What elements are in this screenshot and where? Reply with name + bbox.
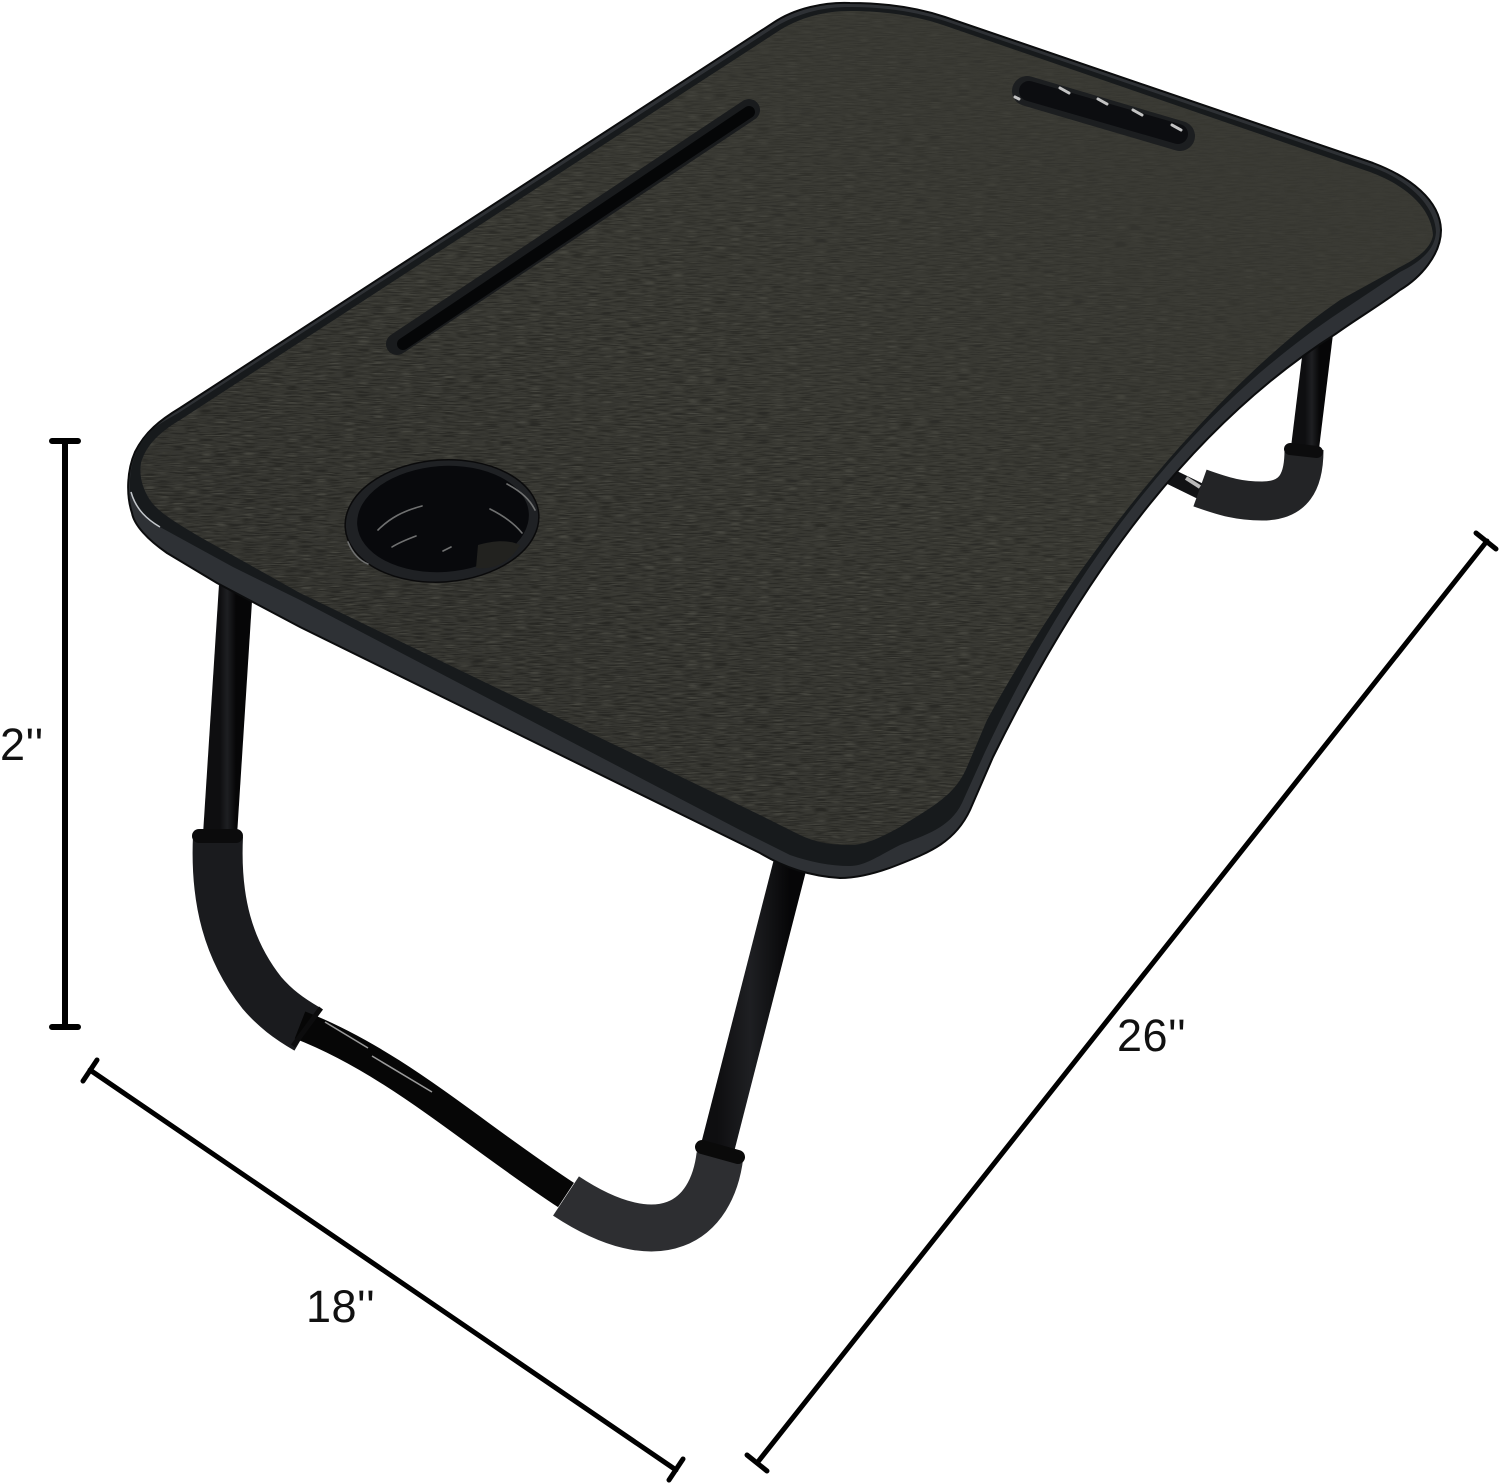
left leg pole <box>220 585 236 835</box>
tabletop wood surface <box>140 11 1433 845</box>
tabletop outer edge <box>128 3 1441 878</box>
cup holder <box>341 453 543 589</box>
height label: 2'' <box>0 719 44 770</box>
wood grain texture <box>140 72 1224 845</box>
width label: 18'' <box>306 1281 375 1332</box>
pen holder well <box>1029 91 1178 134</box>
front leg collar <box>702 1147 738 1157</box>
back leg connector highlight <box>1186 478 1200 487</box>
tablet slot <box>397 110 749 344</box>
length label: 26'' <box>1117 1010 1186 1061</box>
front leg pole <box>717 865 790 1150</box>
left leg collar <box>199 829 236 843</box>
left sleeve end collar <box>293 1008 321 1046</box>
back leg connector <box>1165 474 1210 496</box>
left leg <box>199 585 566 1195</box>
dimension: height <box>0 441 78 1027</box>
front leg <box>566 865 790 1228</box>
dimension: width 18 <box>83 1060 683 1480</box>
back leg pole <box>1305 325 1320 448</box>
tabletop dark rim <box>130 7 1436 866</box>
cup holder well <box>354 460 532 578</box>
width line <box>83 1060 683 1480</box>
tabletop <box>120 0 1450 890</box>
pen holder rim <box>1027 91 1180 136</box>
tabletop edge highlight <box>131 492 160 527</box>
crossbar tube <box>300 1025 566 1195</box>
cup holder floor patch <box>476 541 520 568</box>
slot opening <box>403 112 749 344</box>
front leg sleeve <box>566 1155 720 1228</box>
height line <box>52 441 78 1027</box>
left leg sleeve <box>218 836 307 1029</box>
cup holder rim <box>341 453 543 589</box>
pen holder <box>1015 88 1181 136</box>
slot rim <box>397 110 749 344</box>
pen holder highlights <box>1015 88 1181 130</box>
back leg <box>1165 325 1320 501</box>
length line <box>747 533 1496 1471</box>
crossbar highlight <box>325 1022 432 1092</box>
cup holder highlights <box>348 484 535 564</box>
back leg collar <box>1290 449 1317 452</box>
back leg sleeve <box>1200 450 1304 501</box>
